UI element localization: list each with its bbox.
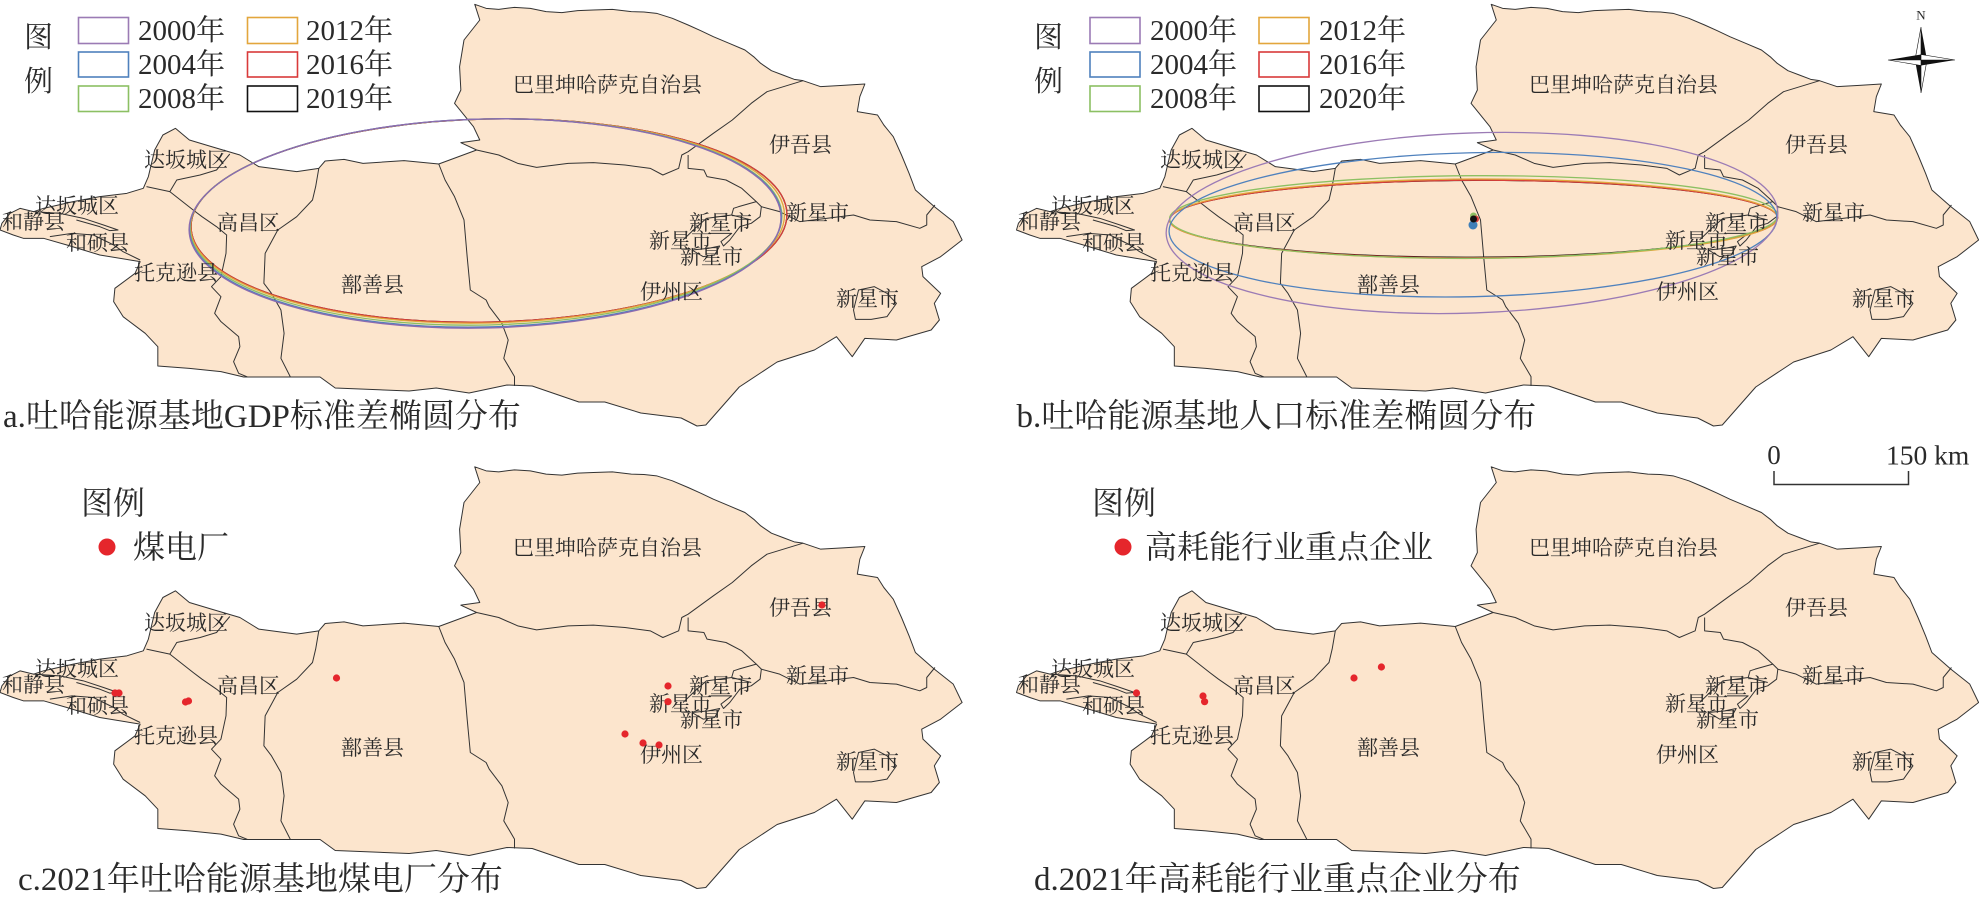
caption d: d.2021年高耗能行业重点企业分布 xyxy=(1034,861,1521,898)
labels d: 高昌区 xyxy=(1233,674,1296,698)
map d xyxy=(1016,467,1979,888)
enterprise dots xyxy=(1133,663,1385,705)
labels a: 新星市 xyxy=(689,211,752,235)
legend b: 2004年 xyxy=(1150,48,1237,81)
legend a: 2004年 xyxy=(138,48,225,81)
legend a: 图 xyxy=(24,22,53,54)
labels c: 伊吾县 xyxy=(769,596,832,620)
labels c: 托克逊县 xyxy=(134,724,218,748)
labels a: 伊吾县 xyxy=(769,133,832,157)
labels d: 达坂城区 xyxy=(1160,611,1244,635)
panel a: GDP standard deviation ellipses xyxy=(0,4,962,435)
labels a: 和硕县 xyxy=(66,231,129,255)
map a xyxy=(0,4,962,426)
legend a: 2008年 xyxy=(138,82,225,115)
panel b: population standard deviation ellipses xyxy=(1016,4,1979,485)
legend b: 2012年 xyxy=(1319,14,1406,47)
labels b xyxy=(1018,73,1915,311)
labels b: 高昌区 xyxy=(1233,211,1296,235)
caption b: b.吐哈能源基地人口标准差椭圆分布 xyxy=(1016,398,1536,435)
labels a: 鄯善县 xyxy=(341,273,404,297)
labels c: 新星市 xyxy=(786,664,849,688)
map c xyxy=(0,467,962,888)
legend a: 2016年 xyxy=(306,48,393,81)
scale bar: 0 xyxy=(1767,440,1781,470)
labels c: 和硕县 xyxy=(66,694,129,718)
legend b: 图 xyxy=(1034,22,1063,54)
legend c xyxy=(81,485,229,565)
legend a: 2000年 xyxy=(138,14,225,47)
labels c xyxy=(2,536,899,774)
labels a: 达坂城区 xyxy=(144,148,228,172)
labels d: 巴里坤哈萨克自治县 xyxy=(1529,536,1718,560)
labels c: 达坂城区 xyxy=(35,657,119,681)
labels c: 达坂城区 xyxy=(144,611,228,635)
legend b: 2020年 xyxy=(1319,82,1406,115)
labels c: 伊州区 xyxy=(640,743,703,767)
labels a: 和静县 xyxy=(2,210,65,234)
legend b: 2016年 xyxy=(1319,48,1406,81)
labels a: 巴里坤哈萨克自治县 xyxy=(513,73,702,97)
caption c: c.2021年吐哈能源基地煤电厂分布 xyxy=(18,861,503,898)
labels b: 新星市 xyxy=(1665,229,1728,253)
labels c: 巴里坤哈萨克自治县 xyxy=(513,536,702,560)
legend d: 高耗能行业重点企业 xyxy=(1145,529,1433,565)
labels c: 鄯善县 xyxy=(341,736,404,760)
labels b: 和静县 xyxy=(1018,210,1081,234)
labels c: 新星市 xyxy=(836,750,899,774)
labels a: 伊州区 xyxy=(640,280,703,304)
labels b: 伊州区 xyxy=(1656,280,1719,304)
labels d: 伊州区 xyxy=(1656,743,1719,767)
labels c: 新星市 xyxy=(689,674,752,698)
labels b: 和硕县 xyxy=(1082,231,1145,255)
legend c: 图例 xyxy=(81,485,145,521)
labels d: 伊吾县 xyxy=(1785,596,1848,620)
labels b: 新星市 xyxy=(1852,287,1915,311)
labels d: 新星市 xyxy=(1802,664,1865,688)
scale bar xyxy=(1767,440,1969,484)
legend d xyxy=(1092,485,1433,565)
labels b: 鄯善县 xyxy=(1357,273,1420,297)
centroid dots b xyxy=(1468,212,1479,230)
coal plant dots xyxy=(111,601,826,749)
compass xyxy=(1888,8,1955,93)
labels a: 高昌区 xyxy=(217,211,280,235)
legend b xyxy=(1034,14,1406,115)
scale bar: 150 km xyxy=(1886,440,1969,470)
labels c: 新星市 xyxy=(680,708,743,732)
legend a: 2012年 xyxy=(306,14,393,47)
labels a: 新星市 xyxy=(836,287,899,311)
labels a xyxy=(2,73,899,311)
labels b: 新星市 xyxy=(1696,245,1759,269)
caption a: a.吐哈能源基地GDP标准差椭圆分布 xyxy=(3,398,521,435)
panel c: coal power plants xyxy=(0,467,962,898)
compass: N xyxy=(1916,8,1926,22)
labels b: 达坂城区 xyxy=(1160,148,1244,172)
legend b: 2000年 xyxy=(1150,14,1237,47)
labels d: 托克逊县 xyxy=(1150,724,1234,748)
labels d: 新星市 xyxy=(1665,692,1728,716)
labels b: 巴里坤哈萨克自治县 xyxy=(1529,73,1718,97)
legend b: 2008年 xyxy=(1150,82,1237,115)
labels b: 新星市 xyxy=(1705,211,1768,235)
labels a: 新星市 xyxy=(786,201,849,225)
labels b: 达坂城区 xyxy=(1051,194,1135,218)
legend d: 图例 xyxy=(1092,485,1156,521)
labels d: 和静县 xyxy=(1018,673,1081,697)
labels d: 鄯善县 xyxy=(1357,736,1420,760)
legend a: 2019年 xyxy=(306,82,393,115)
ellipses b xyxy=(1163,122,1781,324)
labels a: 新星市 xyxy=(649,229,712,253)
panel d: high energy enterprises xyxy=(1016,467,1979,898)
legend b: 例 xyxy=(1034,65,1063,98)
labels c: 新星市 xyxy=(649,692,712,716)
labels d: 和硕县 xyxy=(1082,694,1145,718)
labels d: 新星市 xyxy=(1696,708,1759,732)
map b xyxy=(1016,4,1979,426)
labels b: 伊吾县 xyxy=(1785,133,1848,157)
labels a: 新星市 xyxy=(680,245,743,269)
legend a: 例 xyxy=(24,65,53,98)
legend a xyxy=(24,14,393,115)
labels b: 新星市 xyxy=(1802,201,1865,225)
labels c: 高昌区 xyxy=(217,674,280,698)
labels a: 托克逊县 xyxy=(134,261,218,285)
labels d: 新星市 xyxy=(1705,674,1768,698)
ellipses a xyxy=(187,112,789,335)
labels a: 达坂城区 xyxy=(35,194,119,218)
legend c: 煤电厂 xyxy=(133,529,229,565)
labels c: 和静县 xyxy=(2,673,65,697)
labels d xyxy=(1018,536,1915,774)
labels b: 托克逊县 xyxy=(1150,261,1234,285)
labels d: 达坂城区 xyxy=(1051,657,1135,681)
labels d: 新星市 xyxy=(1852,750,1915,774)
